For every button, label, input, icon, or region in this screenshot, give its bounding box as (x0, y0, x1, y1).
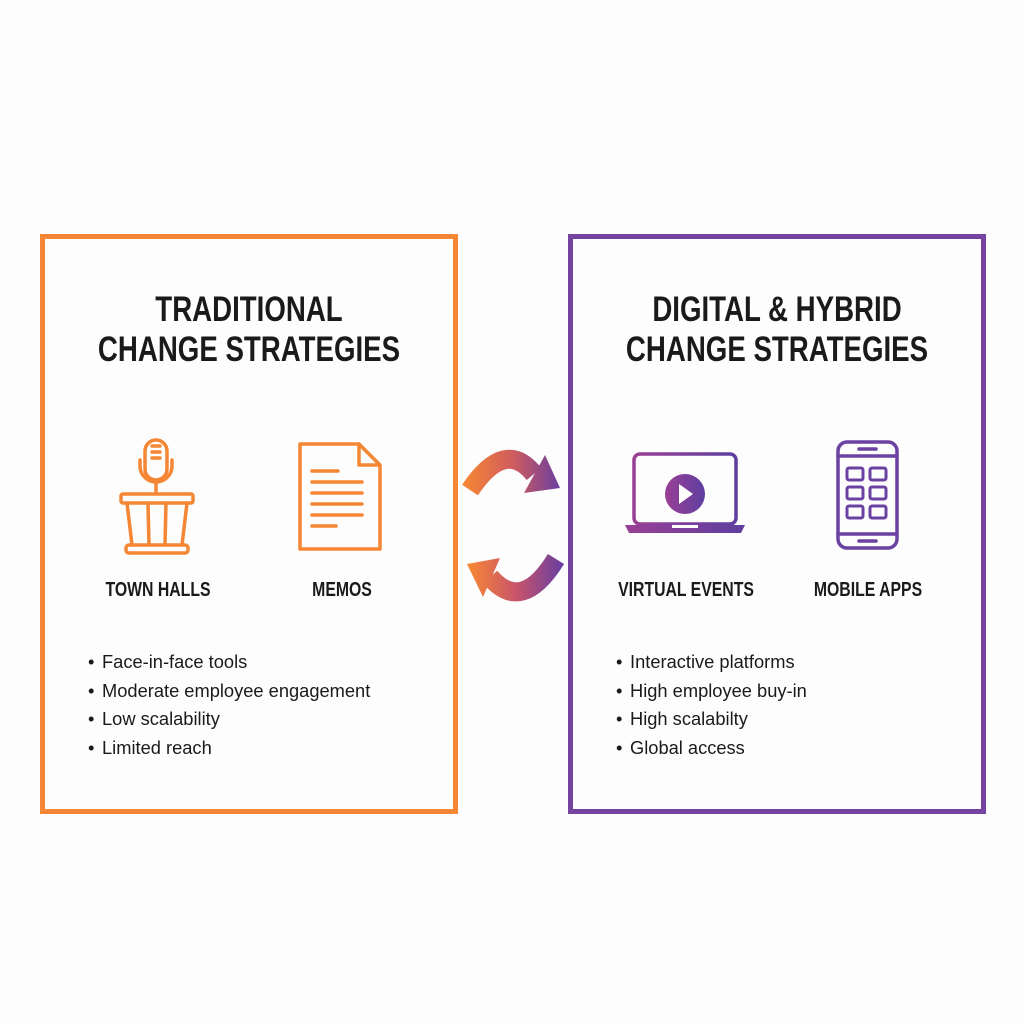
icon: podium microphone (119, 438, 195, 555)
list: traditional: Face-in-face tools (102, 651, 247, 672)
list: digital: Interactive platforms (630, 651, 795, 672)
list: digital (616, 651, 807, 758)
list: digital: Global access (630, 736, 745, 758)
title: traditional: TRADITIONAL (155, 290, 343, 329)
title: digital (626, 290, 928, 369)
label: town halls: TOWN HALLS (105, 579, 211, 601)
label: memos: MEMOS (312, 579, 372, 601)
list: traditional: Low scalability (102, 708, 220, 729)
title: digital: CHANGE STRATEGIES (626, 330, 928, 369)
title: traditional: CHANGE STRATEGIES (98, 330, 400, 369)
arrow: top right-pointing (470, 455, 560, 493)
label: virtual events: VIRTUAL EVENTS (618, 579, 754, 601)
list: digital: High employee buy-in (630, 680, 807, 700)
title: traditional (98, 290, 400, 369)
title: digital: DIGITAL & HYBRID (652, 290, 902, 329)
label: mobile apps: MOBILE APPS (814, 579, 922, 601)
arrow: bottom left-pointing (467, 558, 556, 597)
icon: laptop video (625, 452, 745, 533)
list: traditional (88, 651, 370, 758)
panel: digital (568, 234, 986, 814)
icon: memo document (298, 442, 382, 551)
list: digital: High scalabilty (630, 708, 748, 729)
icon: mobile phone apps (836, 440, 899, 550)
list: traditional: Limited reach (102, 736, 212, 758)
panel: traditional (40, 234, 458, 814)
list: traditional: Moderate employee engagement (102, 680, 370, 700)
